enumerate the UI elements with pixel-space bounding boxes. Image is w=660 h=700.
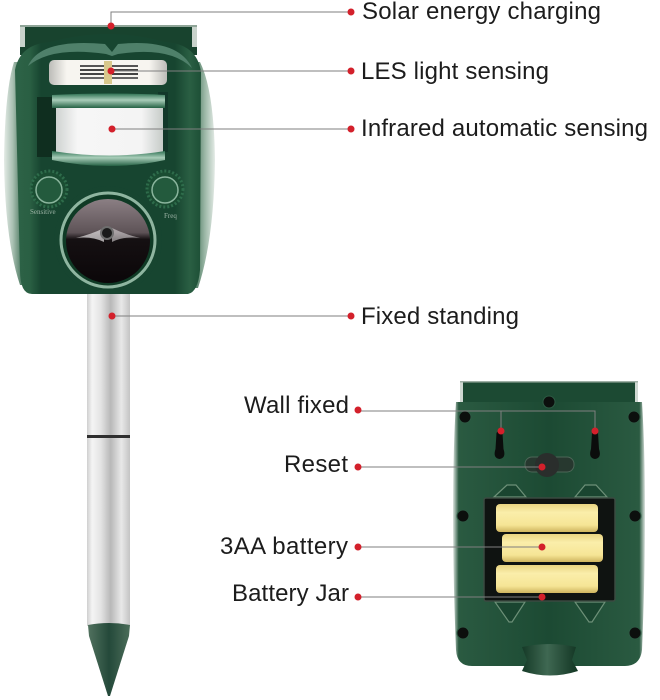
back housing	[453, 402, 645, 666]
front device body	[4, 25, 215, 294]
main housing	[15, 34, 201, 294]
back stand socket	[522, 644, 578, 676]
back device	[453, 381, 645, 676]
battery mounting tabs	[494, 485, 607, 622]
battery 1	[496, 504, 598, 532]
knob: sensitivity	[30, 171, 67, 216]
battery 3	[496, 565, 598, 593]
knob: frequency: Freq	[164, 212, 177, 220]
battery 2	[502, 534, 603, 562]
battery compartment	[484, 498, 615, 601]
pole: fixed standing stake	[87, 294, 130, 696]
infrared sensor	[37, 92, 168, 166]
light sensor window	[49, 60, 167, 85]
keyhole slots	[495, 430, 600, 459]
label: reset: Reset	[284, 451, 348, 478]
label: 3AA battery: 3AA battery	[220, 533, 348, 560]
label: wall fixed: Wall fixed	[244, 392, 349, 419]
reset switch	[525, 453, 574, 477]
top bevel highlight	[28, 43, 192, 68]
knob: sensitivity: Sensitive	[30, 208, 56, 216]
label: LES light sensing: LES light sensing	[361, 58, 549, 85]
screw holes	[457, 396, 641, 639]
label: infrared automatic sensing: Infrared automatic sensing	[361, 115, 648, 142]
knob: frequency	[147, 171, 183, 220]
back top flap	[460, 381, 638, 411]
solar panel top	[20, 25, 197, 55]
leader lines	[111, 12, 595, 597]
red marker dots	[108, 8, 598, 600]
side wings	[4, 62, 215, 288]
speaker	[54, 186, 162, 294]
label: fixed standing: Fixed standing	[361, 303, 519, 330]
label: battery jar: Battery Jar	[232, 580, 349, 607]
